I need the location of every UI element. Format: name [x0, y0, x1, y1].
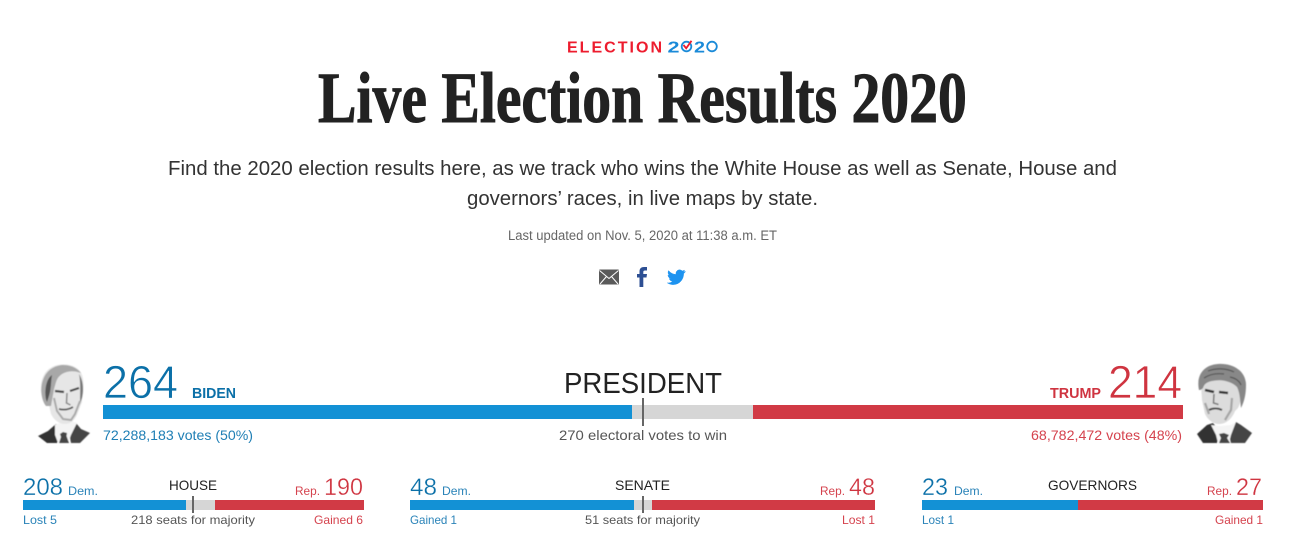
governors change: Rep: Gained 1: [1215, 513, 1263, 527]
description: governors’ races, in live maps by state.: [467, 188, 818, 210]
votes: Trump: 68,782,472 votes (48%): [1031, 427, 1182, 443]
house count: Rep: 190: [324, 474, 363, 501]
portrait: Trump: [1197, 364, 1252, 443]
panel: house: [23, 474, 364, 527]
senate majority note: 51 seats for majority: [585, 513, 700, 527]
panel: president: [38, 356, 1252, 443]
governors count: Rep: 27: [1236, 474, 1262, 501]
president bar: [103, 398, 1183, 426]
senate bar: [410, 496, 875, 513]
governors count: Dem: 23: [922, 474, 948, 501]
senate count: Dem: 48: [410, 474, 437, 501]
house count: Dem: 208: [23, 474, 63, 501]
governors change: Dem: Lost 1: [922, 513, 954, 527]
label: Dem: Dem.: [442, 484, 471, 498]
house change: Rep: Gained 6: [314, 513, 363, 527]
icon: email: [599, 270, 619, 284]
title: Live Election Results 2020: [318, 59, 967, 139]
election 2020 logo: [567, 40, 717, 56]
senate change: Rep: Lost 1: [842, 513, 875, 527]
votes: Biden: 72,288,183 votes (50%): [103, 427, 253, 443]
house bar: [23, 496, 364, 513]
label: Rep: Rep.: [1207, 484, 1232, 498]
icon: facebook: [637, 267, 647, 287]
senate change: Dem: Gained 1: [410, 513, 457, 527]
label: Rep: Rep.: [820, 484, 845, 498]
icon: twitter: [667, 270, 686, 285]
senate count: Rep: 48: [849, 474, 875, 501]
candidate name: Biden: BIDEN: [192, 386, 236, 402]
election 2020 logo: ELECTION: [567, 40, 662, 56]
heading: senate: SENATE: [615, 477, 670, 493]
description: [168, 158, 1117, 210]
election 2020 logo: 2: [668, 40, 680, 56]
panel: senate: [410, 474, 875, 527]
description: Find the 2020 election results here, as we track who wins the White House as well as Senate, House and: [168, 158, 1117, 180]
governors bar: [922, 500, 1263, 510]
heading: house: HOUSE: [169, 477, 217, 493]
last updated timestamp: Last updated on Nov. 5, 2020 at 11:38 a.m. ET: [508, 228, 777, 243]
heading: president: PRESIDENT: [564, 368, 722, 400]
house majority note: 218 seats for majority: [131, 513, 255, 527]
label: Rep: Rep.: [295, 484, 320, 498]
heading: governors: GOVERNORS: [1048, 477, 1137, 493]
candidate name: Trump: TRUMP: [1050, 386, 1101, 402]
panel: governors: [922, 474, 1263, 527]
house change: Dem: Lost 5: [23, 513, 57, 527]
electoral votes note: 270 electoral votes to win: [559, 427, 727, 443]
president seat count: Trump: 214: [1108, 356, 1182, 408]
election 2020 logo: 2: [694, 40, 705, 56]
portrait: Biden: [38, 364, 90, 443]
label: Dem: Dem.: [954, 484, 983, 498]
president seat count: Biden: 264: [103, 356, 178, 408]
label: Dem: Dem.: [68, 484, 98, 498]
